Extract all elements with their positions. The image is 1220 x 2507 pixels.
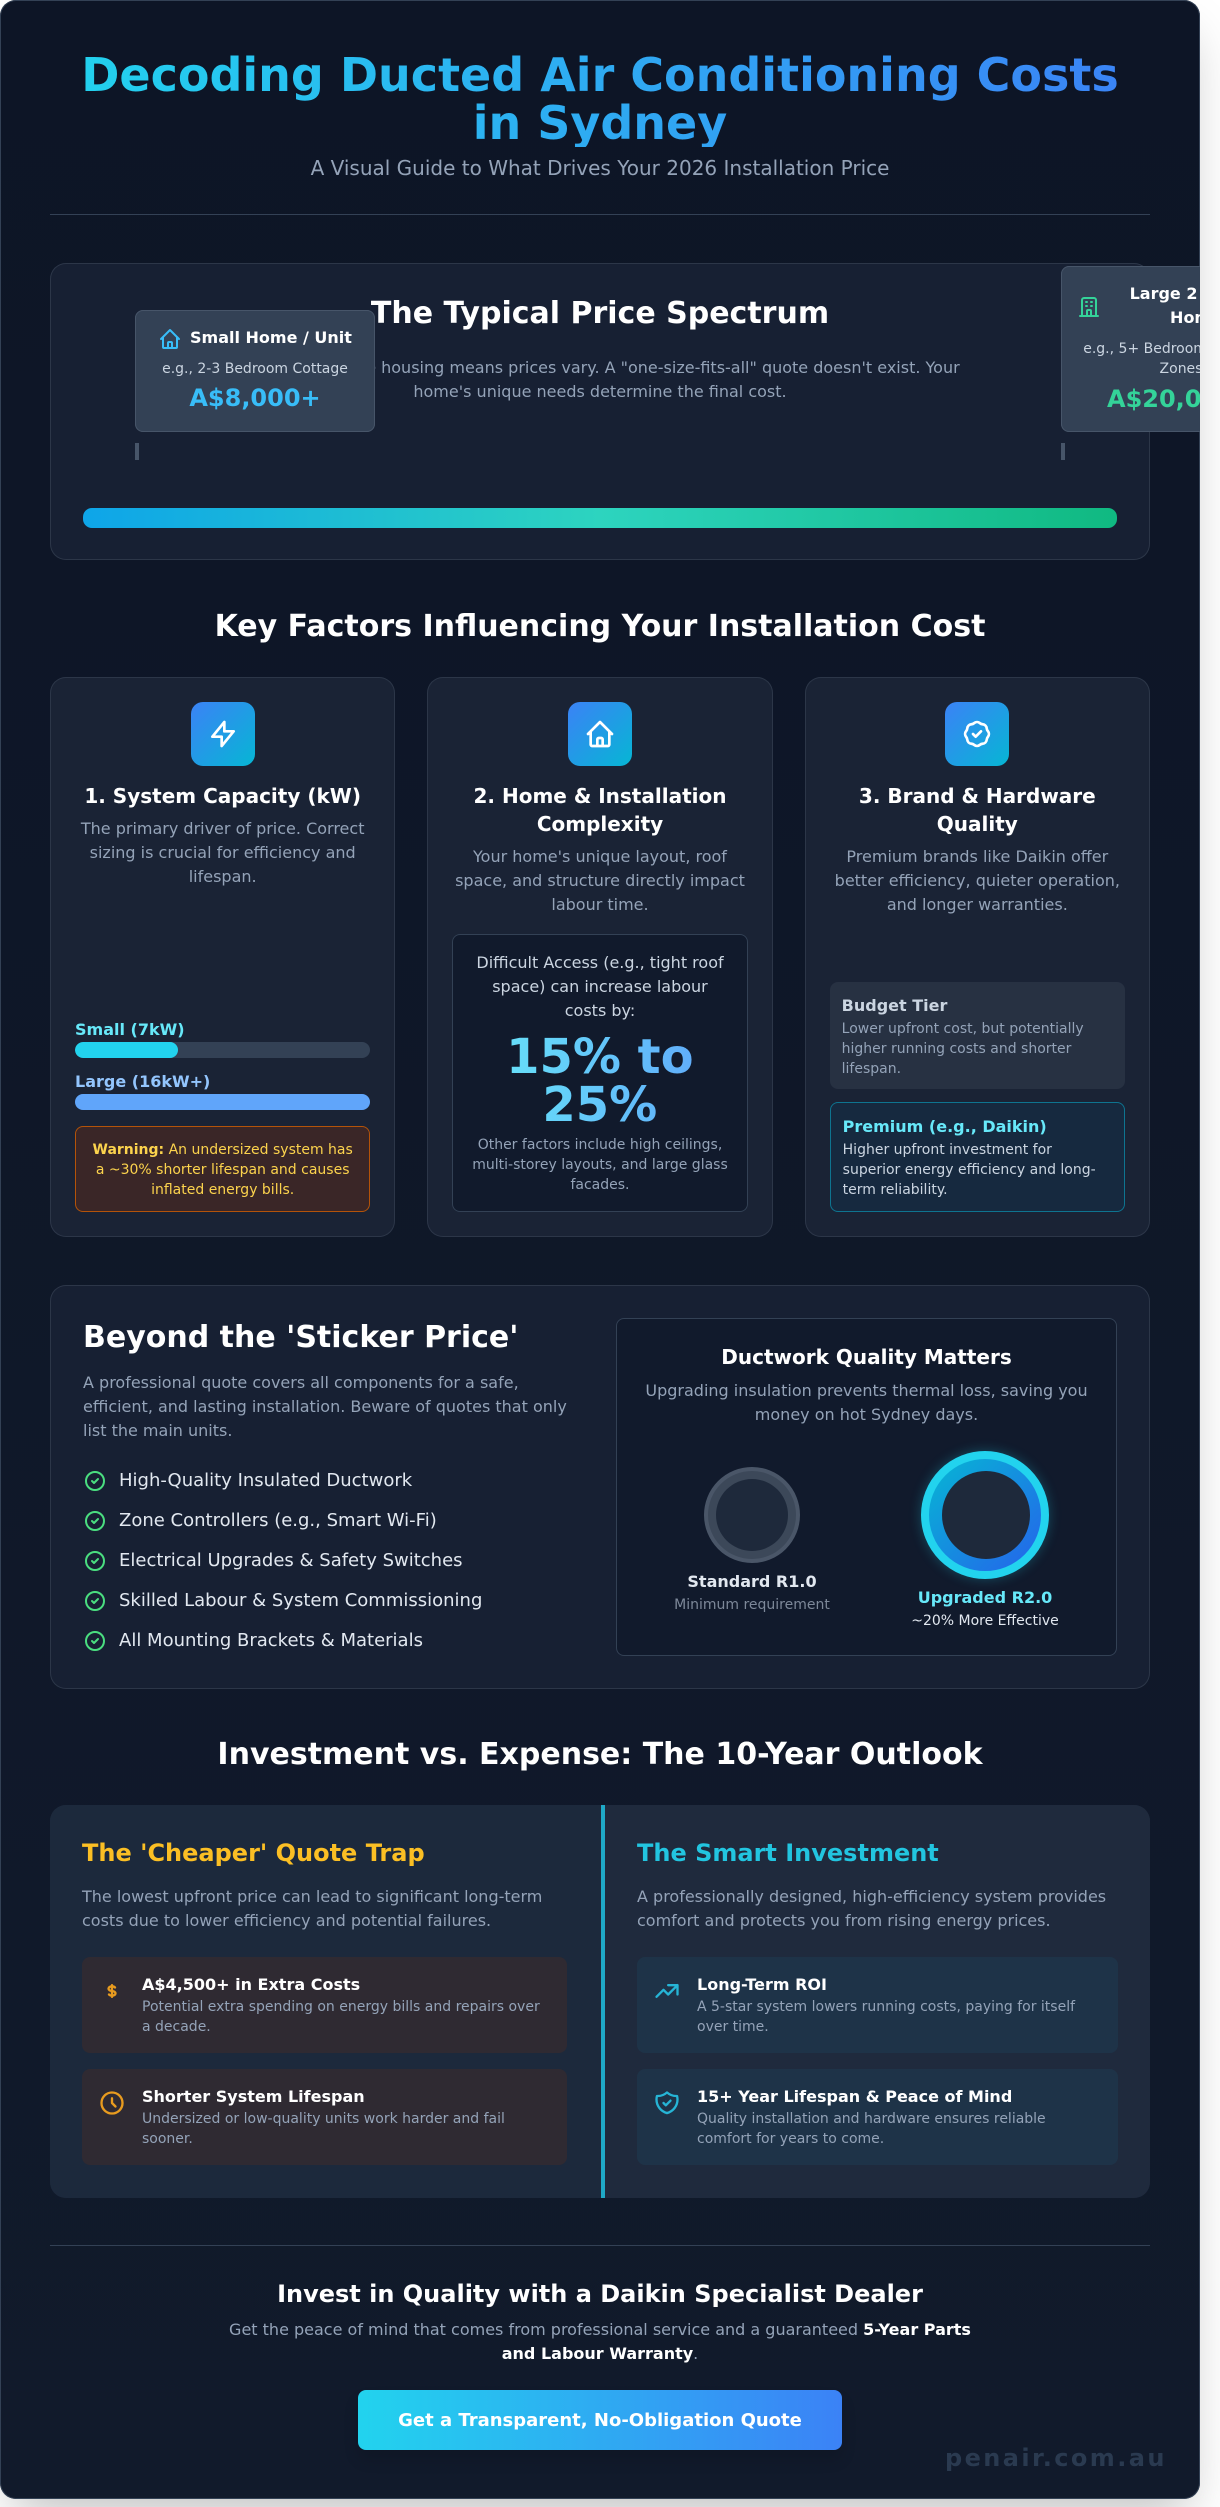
budget tier text: higher running costs and shorter bbox=[842, 1041, 1071, 1057]
icon: check bbox=[85, 1631, 105, 1651]
ductwork heading: Ductwork Quality Matters bbox=[721, 1345, 1012, 1369]
factor 3 heading: Quality bbox=[937, 812, 1018, 836]
extra costs text: Potential extra spending on energy bills and repairs over bbox=[142, 1999, 540, 2015]
list item: Skilled Labour & System Commissioning bbox=[119, 1590, 482, 1611]
trap description: The lowest upfront price can lead to significant long-term bbox=[82, 1887, 542, 1906]
factor 3 description: and longer warranties. bbox=[887, 895, 1068, 914]
icon: dollar bbox=[107, 1984, 117, 1998]
icon: trending up bbox=[655, 1984, 679, 1998]
ROI text bbox=[697, 1999, 1076, 2035]
panel: ductwork quality bbox=[616, 1318, 1117, 1656]
trap description bbox=[82, 1887, 542, 1930]
access description bbox=[476, 953, 724, 1020]
callout: undersizing warning: a ~30% shorter lifespan and causes bbox=[96, 1162, 350, 1178]
ductwork description bbox=[645, 1381, 1088, 1424]
title: in Sydney bbox=[473, 96, 727, 150]
column divider bbox=[601, 1805, 605, 2198]
label: large capacity: Large (16kW+) bbox=[75, 1072, 210, 1091]
icon: house bbox=[160, 329, 180, 349]
list item: All Mounting Brackets & Materials bbox=[119, 1630, 423, 1651]
icon: clock bbox=[100, 2091, 124, 2115]
footer call to action bbox=[50, 2245, 1167, 2472]
icon: check bbox=[85, 1471, 105, 1491]
heading: investment vs expense: Investment vs. Expense: The 10-Year Outlook bbox=[217, 1737, 983, 1772]
big stat: 15% to bbox=[506, 1029, 694, 1085]
other factors note: multi-storey layouts, and large glass bbox=[472, 1157, 728, 1173]
standard label: Standard R1.0 bbox=[687, 1572, 817, 1591]
premium tier text: superior energy efficiency and long- bbox=[843, 1162, 1096, 1178]
premium tier text bbox=[843, 1142, 1096, 1198]
upgraded label: Upgraded R2.0 bbox=[918, 1588, 1052, 1607]
diagram: upgraded insulation ring bbox=[921, 1451, 1049, 1579]
lifespan benefit text: comfort for years to come. bbox=[697, 2131, 884, 2147]
callout: undersizing warning: inflated energy bills. bbox=[151, 1182, 294, 1198]
bar: small capacity bbox=[75, 1042, 370, 1058]
button: get a quote bbox=[358, 2390, 842, 2450]
large home example bbox=[1083, 341, 1200, 377]
factor 3 heading bbox=[859, 784, 1096, 836]
footer text: Get the peace of mind that comes from professional service and a guaranteed 5-Year Parts bbox=[229, 2320, 971, 2339]
heading: key factors: Key Factors Influencing Your Installation Cost bbox=[215, 609, 985, 644]
panel: brand quality bbox=[805, 677, 1150, 1237]
title bbox=[50, 51, 1150, 147]
access description: costs by: bbox=[565, 1001, 635, 1020]
budget tier text bbox=[842, 1021, 1084, 1077]
ROI text: over time. bbox=[697, 2019, 769, 2035]
factor 1 description: The primary driver of price. Correct bbox=[81, 819, 364, 838]
premium tier title: Premium (e.g., Daikin) bbox=[843, 1117, 1047, 1136]
other factors note: facades. bbox=[570, 1177, 630, 1193]
factor 2 description: space, and structure directly impact bbox=[455, 871, 745, 890]
diagram: standard insulation ring bbox=[704, 1467, 800, 1563]
factor 2 description: Your home's unique layout, roof bbox=[473, 847, 727, 866]
sticker price description: list the main units. bbox=[83, 1421, 232, 1440]
lifespan title: Shorter System Lifespan bbox=[142, 2087, 365, 2106]
upgraded note: ~20% More Effective bbox=[911, 1613, 1059, 1629]
big stat: 25% bbox=[542, 1077, 657, 1133]
budget tier text: lifespan. bbox=[842, 1061, 901, 1077]
subtitle: A Visual Guide to What Drives Your 2026 Installation Price bbox=[311, 156, 889, 180]
investment heading: The Smart Investment bbox=[637, 1839, 939, 1867]
factor 3 description bbox=[835, 847, 1120, 914]
investment description: A professionally designed, high-efficiency system provides bbox=[637, 1887, 1106, 1906]
factor 2 description: labour time. bbox=[551, 895, 649, 914]
footer text bbox=[229, 2320, 971, 2363]
icon: check bbox=[85, 1551, 105, 1571]
icon: shield check bbox=[655, 2091, 679, 2114]
icon: check bbox=[85, 1511, 105, 1531]
access description: space) can increase labour bbox=[492, 977, 708, 996]
spectrum description: home's unique needs determine the final cost. bbox=[413, 382, 787, 401]
footer heading: Invest in Quality with a Daikin Specialist Dealer bbox=[277, 2280, 923, 2308]
factor 1 description: sizing is crucial for efficiency and bbox=[90, 843, 356, 862]
bar: large capacity bbox=[75, 1094, 370, 1110]
investment description: comfort and protects you from rising energy prices. bbox=[637, 1911, 1051, 1930]
cost item: shorter lifespan bbox=[82, 2069, 567, 2165]
factor 3 description: Premium brands like Daikin offer bbox=[846, 847, 1108, 866]
factor 2 heading: 2. Home & Installation bbox=[474, 784, 726, 808]
budget tier text: Lower upfront cost, but potentially bbox=[842, 1021, 1084, 1037]
ductwork description: Upgrading insulation prevents thermal loss, saving you bbox=[645, 1381, 1088, 1400]
factor 3 description: better efficiency, quieter operation, bbox=[835, 871, 1120, 890]
factor 2 description bbox=[455, 847, 745, 914]
callout: undersizing warning: Warning: An undersized system has bbox=[92, 1142, 353, 1158]
benefit item: ROI bbox=[637, 1957, 1118, 2053]
tier: budget bbox=[830, 982, 1125, 1089]
header bbox=[50, 48, 1150, 215]
panel: comparison bbox=[50, 1805, 1150, 2198]
icon: building bbox=[1079, 297, 1099, 317]
factor 3 heading: 3. Brand & Hardware bbox=[859, 784, 1096, 808]
budget tier title: Budget Tier bbox=[842, 996, 947, 1015]
factor 1 description: lifespan. bbox=[189, 867, 257, 886]
extra costs title: A$4,500+ in Extra Costs bbox=[142, 1975, 360, 1994]
small home example: e.g., 2-3 Bedroom Cottage bbox=[162, 361, 348, 377]
panel: beyond the sticker price bbox=[50, 1285, 1150, 1689]
lifespan benefit text bbox=[697, 2111, 1046, 2147]
button: get a quote: Get a Transparent, No-Obligation Quote bbox=[398, 2410, 802, 2431]
sticker price heading: Beyond the 'Sticker Price' bbox=[83, 1320, 518, 1355]
trap description: costs due to lower efficiency and potential failures. bbox=[82, 1911, 491, 1930]
other factors note bbox=[472, 1137, 728, 1193]
large home label bbox=[1130, 284, 1200, 327]
lifespan text: Undersized or low-quality units work harder and fail bbox=[142, 2111, 505, 2127]
access description: Difficult Access (e.g., tight roof bbox=[476, 953, 724, 972]
sticker price description: A professional quote covers all components for a safe, bbox=[83, 1373, 519, 1392]
benefit item: lifespan bbox=[637, 2069, 1118, 2165]
cost item: extra costs bbox=[82, 1957, 567, 2053]
sticker price description: efficient, and lasting installation. Beware of quotes that only bbox=[83, 1397, 567, 1416]
factor 2 heading bbox=[474, 784, 726, 836]
list item: Electrical Upgrades & Safety Switches bbox=[119, 1550, 463, 1571]
icon: house bbox=[568, 702, 632, 766]
ductwork description: money on hot Sydney days. bbox=[755, 1405, 978, 1424]
title: Decoding Ducted Air Conditioning Costs bbox=[81, 48, 1119, 102]
list item: Zone Controllers (e.g., Smart Wi-Fi) bbox=[119, 1510, 437, 1531]
footer text: and Labour Warranty. bbox=[502, 2344, 698, 2363]
spectrum description: Sydney's diverse housing means prices vary. A "one-size-fits-all" quote doesn't exist. Your bbox=[240, 358, 960, 377]
factor 1 heading: 1. System Capacity (kW) bbox=[84, 784, 361, 808]
price card: small home bbox=[135, 310, 375, 432]
column: smart investment bbox=[605, 1805, 1150, 2198]
tier: premium bbox=[830, 1102, 1125, 1212]
panel: system capacity bbox=[50, 677, 395, 1237]
small home price: A$8,000+ bbox=[189, 384, 321, 412]
extra costs text bbox=[142, 1999, 540, 2035]
callout: difficult access bbox=[452, 934, 748, 1212]
factor 2 heading: Complexity bbox=[537, 812, 663, 836]
lifespan benefit title: 15+ Year Lifespan & Peace of Mind bbox=[697, 2087, 1012, 2106]
small home label: Small Home / Unit bbox=[190, 328, 352, 347]
marker: large home bbox=[1061, 443, 1065, 460]
icon: badge check bbox=[945, 702, 1009, 766]
icon: check bbox=[85, 1591, 105, 1611]
price card: large home bbox=[1061, 266, 1220, 432]
premium tier text: term reliability. bbox=[843, 1182, 948, 1198]
ROI text: A 5-star system lowers running costs, paying for itself bbox=[697, 1999, 1075, 2015]
label: small capacity: Small (7kW) bbox=[75, 1020, 185, 1039]
other factors note: Other factors include high ceilings, bbox=[478, 1137, 722, 1153]
column: cheaper quote trap bbox=[50, 1805, 601, 2198]
icon: lightning bolt bbox=[191, 702, 255, 766]
lifespan benefit text: Quality installation and hardware ensures reliable bbox=[697, 2111, 1046, 2127]
list item: High-Quality Insulated Ductwork bbox=[119, 1470, 412, 1491]
factor 1 description bbox=[80, 819, 364, 886]
panel: price spectrum bbox=[50, 263, 1150, 560]
extra costs text: a decade. bbox=[142, 2019, 211, 2035]
lifespan text: sooner. bbox=[142, 2131, 193, 2147]
watermark: penair.com.au bbox=[945, 2444, 1167, 2472]
callout: undersizing warning bbox=[75, 1126, 370, 1212]
ROI title: Long-Term ROI bbox=[697, 1975, 827, 1994]
spectrum description bbox=[240, 358, 960, 401]
lifespan text bbox=[142, 2111, 505, 2147]
investment description bbox=[637, 1887, 1106, 1930]
panel: home complexity bbox=[427, 677, 773, 1237]
standard note: Minimum requirement bbox=[674, 1597, 830, 1613]
big stat bbox=[469, 1033, 730, 1129]
marker: small home bbox=[135, 443, 139, 460]
factors row bbox=[50, 677, 1150, 1237]
trap heading: The 'Cheaper' Quote Trap bbox=[82, 1839, 425, 1867]
spectrum heading: The Typical Price Spectrum bbox=[371, 296, 829, 331]
sticker price description bbox=[83, 1373, 567, 1440]
spectrum bar bbox=[83, 508, 1117, 528]
premium tier text: Higher upfront investment for bbox=[843, 1142, 1052, 1158]
